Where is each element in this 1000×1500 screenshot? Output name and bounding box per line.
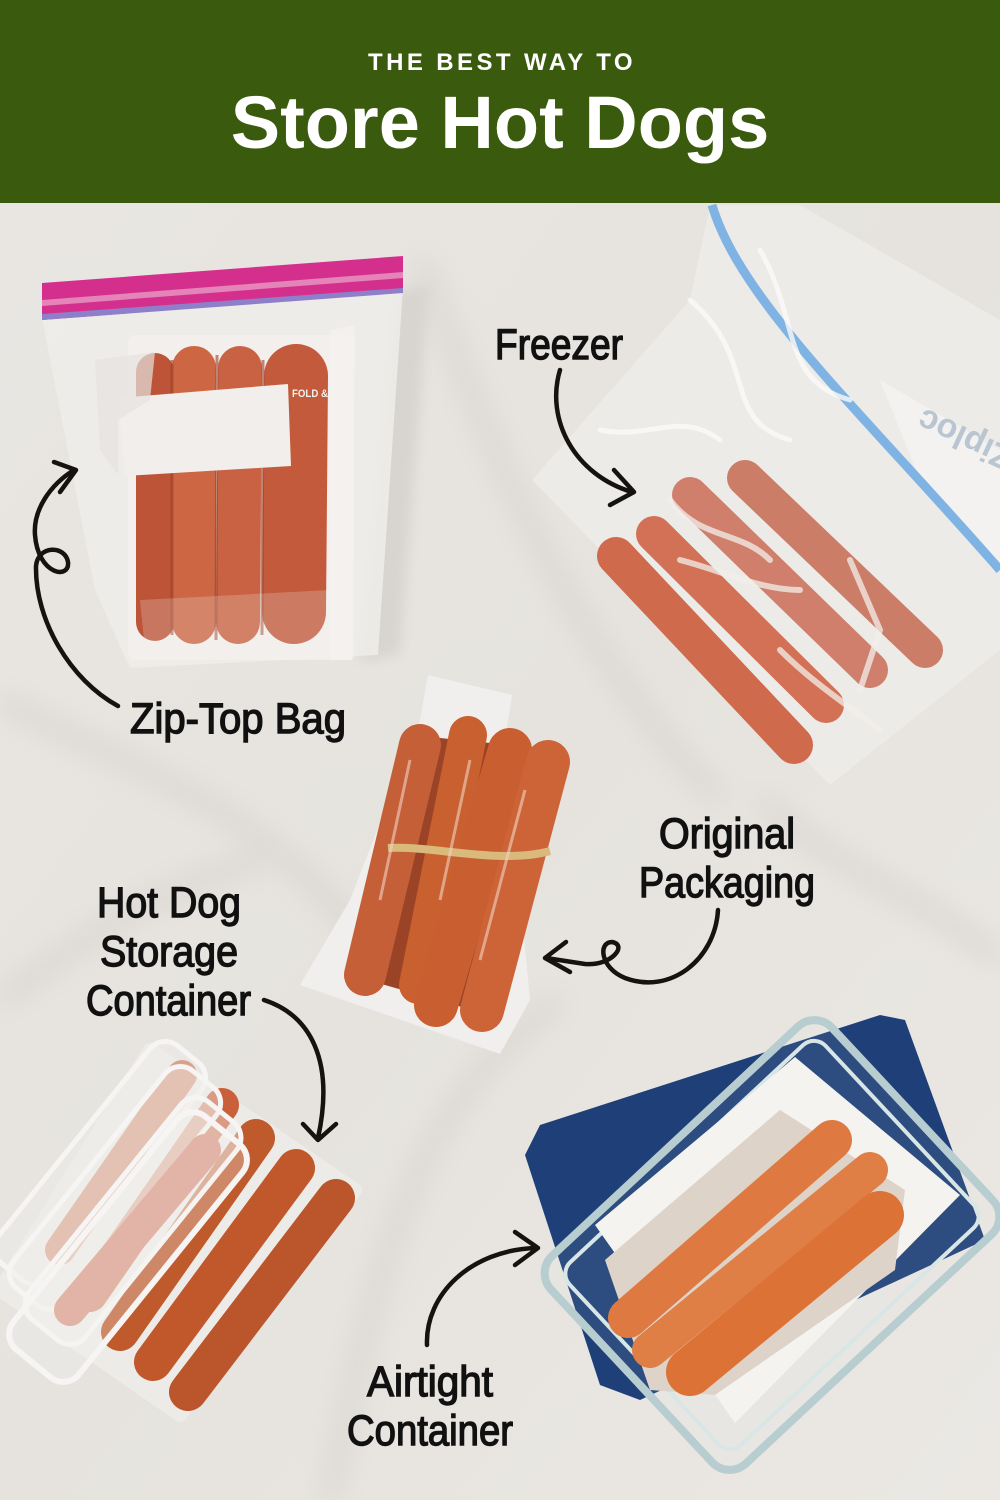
front hot dog through lid: [70, 1150, 205, 1310]
zip-top bag: [42, 256, 430, 668]
label: Airtight Container: [347, 1358, 513, 1455]
bag film: [532, 205, 1000, 785]
inner pack: [128, 335, 354, 660]
label: Airtight Container: Container: [347, 1407, 513, 1455]
arrow: Freezer: [556, 370, 634, 505]
plastic shine: [380, 760, 525, 960]
kicker text: THE BEST WAY TO: [368, 49, 636, 76]
front lid: [1, 1104, 255, 1390]
label: Airtight Container: Airtight: [367, 1358, 493, 1406]
bag body: [42, 288, 403, 668]
dark gap behind hot dogs: [350, 735, 560, 1015]
frost: [670, 500, 880, 730]
segment shadows: [172, 355, 263, 640]
hot dogs: [60, 1075, 336, 1392]
hot dogs in bag: [155, 368, 296, 622]
label: Original Packaging: Packaging: [639, 859, 815, 907]
arrow: Airtight Container: [427, 1232, 538, 1345]
container lids: [0, 1033, 249, 1352]
container base: [0, 1050, 355, 1415]
film wrinkles: [600, 250, 850, 440]
glass dish: [535, 1010, 1000, 1480]
label: Hot Dog Storage Container: Storage: [100, 928, 238, 976]
blue lid: [525, 1015, 985, 1400]
paper backing: [595, 1057, 960, 1423]
hot dogs: [365, 735, 548, 1010]
hot dogs: [628, 1140, 880, 1372]
bag printed label: [118, 384, 291, 476]
original packaging: [300, 675, 560, 1054]
frozen hot dogs: [616, 478, 925, 745]
hot dog storage container: [0, 1033, 355, 1415]
arrow: Original Packaging: [545, 910, 718, 982]
arrow: Zip-Top Bag: [35, 462, 118, 706]
label: Hot Dog Storage Container: Hot Dog: [97, 879, 241, 927]
label: Original Packaging: [639, 810, 815, 907]
header banner: [0, 0, 1000, 203]
label: Hot Dog Storage Container: [86, 879, 251, 1025]
backing paper: [300, 675, 530, 1054]
zip closure band: [42, 256, 403, 320]
bag print panel: [95, 352, 155, 475]
label: Freezer: Freezer: [495, 321, 623, 369]
label: Zip-Top Bag: Zip-Top Bag: [130, 695, 346, 743]
vacuum pack interior: [605, 1110, 905, 1395]
label: Original Packaging: Original: [659, 810, 795, 858]
rubber band: [388, 848, 550, 856]
freezer bag: [532, 205, 1000, 785]
label: Hot Dog Storage Container: Container: [86, 977, 251, 1025]
airtight container: [525, 1010, 1000, 1480]
bag shadow: [360, 285, 430, 662]
bag highlights: [140, 590, 330, 650]
arrow: Storage Container: [264, 1000, 336, 1140]
bag print text: FOLD &: [292, 388, 328, 400]
bag zip label: [880, 380, 1000, 570]
bag blue zip: [712, 205, 1000, 570]
title: Store Hot Dogs: [231, 81, 769, 164]
